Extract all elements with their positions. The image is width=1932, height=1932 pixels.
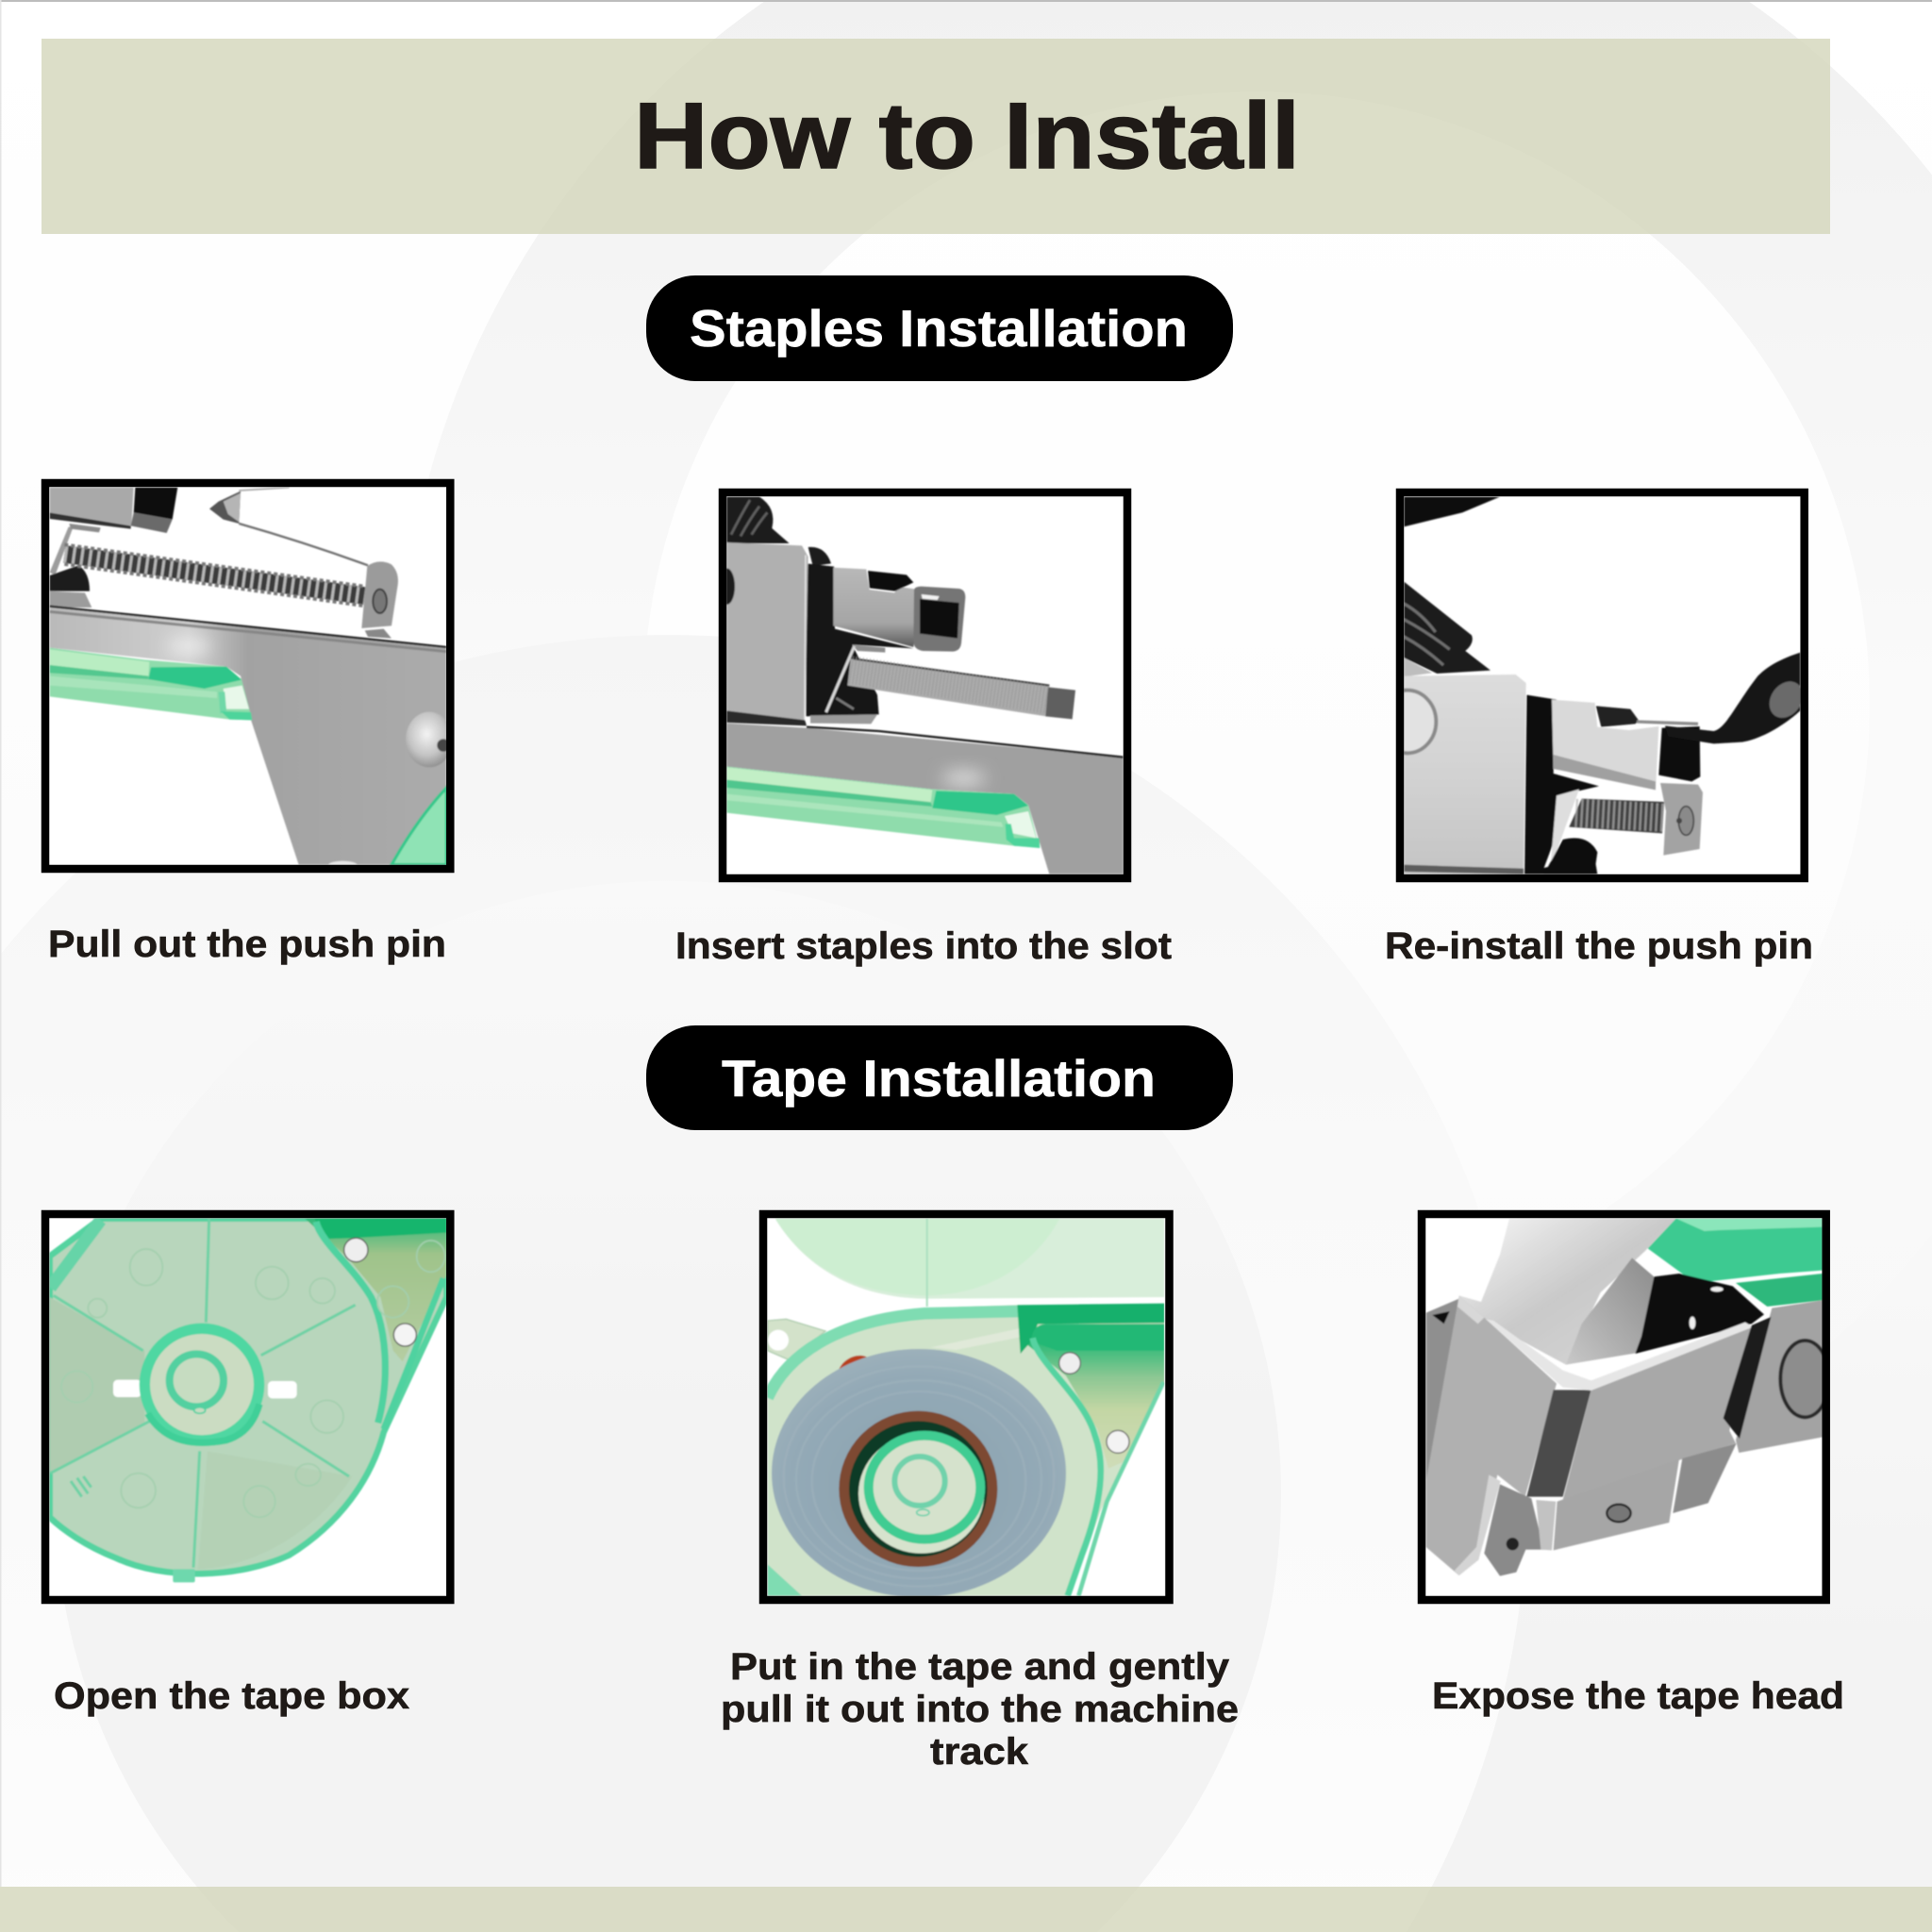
photo: tape roll in box xyxy=(768,1219,1164,1596)
caption: re-install the push pin: Re-install the push pin xyxy=(1385,925,1813,967)
caption: open the tape box: Open the tape box xyxy=(54,1675,409,1717)
photo frame xyxy=(723,492,1127,878)
caption: put in the tape: pull it out into the machine xyxy=(721,1689,1239,1730)
background: lower ring xyxy=(0,635,1527,1932)
background: upper ring xyxy=(398,0,1932,1563)
photo frame xyxy=(1400,492,1805,878)
title banner xyxy=(42,39,1830,234)
background: upper ring centre xyxy=(643,92,1870,1318)
photo frame xyxy=(763,1214,1170,1600)
panel: put in the tape xyxy=(763,1214,1170,1600)
heading text: staples installation: Staples Installation xyxy=(690,299,1188,358)
heading pill: tape installation xyxy=(646,1025,1233,1130)
photo frame xyxy=(1422,1214,1826,1600)
photo: staples entering the slot xyxy=(726,496,1124,874)
photo: stapler head with tape xyxy=(1426,1219,1823,1596)
photo frame xyxy=(45,483,450,869)
caption: expose the tape head: Expose the tape head xyxy=(1432,1675,1844,1717)
photo: opened tape box lid xyxy=(49,1219,447,1596)
heading pill: staples installation xyxy=(646,275,1233,381)
caption: put in the tape xyxy=(721,1646,1239,1773)
caption: pull out the push pin: Pull out the push pin xyxy=(48,924,446,965)
panel: open the tape box xyxy=(40,1214,450,1600)
photo: push pin pulled out xyxy=(49,487,447,865)
caption: insert staples into the slot: Insert staples into the slot xyxy=(675,925,1172,967)
photo: push pin re-installed xyxy=(1404,496,1800,874)
footer band xyxy=(0,1887,1932,1932)
caption: put in the tape: Put in the tape and gently xyxy=(730,1646,1230,1688)
caption: put in the tape: track xyxy=(930,1731,1029,1773)
title: How to Install xyxy=(634,83,1300,188)
panel: re-install the push pin xyxy=(1378,492,1809,878)
background: lower ring centre xyxy=(55,881,1281,1932)
panel: pull out the push pin xyxy=(45,483,453,869)
photo frame xyxy=(45,1214,450,1600)
panel: insert staples into the slot xyxy=(719,492,1127,878)
panel: expose the tape head xyxy=(1422,1214,1829,1600)
heading text: tape installation: Tape Installation xyxy=(722,1049,1156,1108)
